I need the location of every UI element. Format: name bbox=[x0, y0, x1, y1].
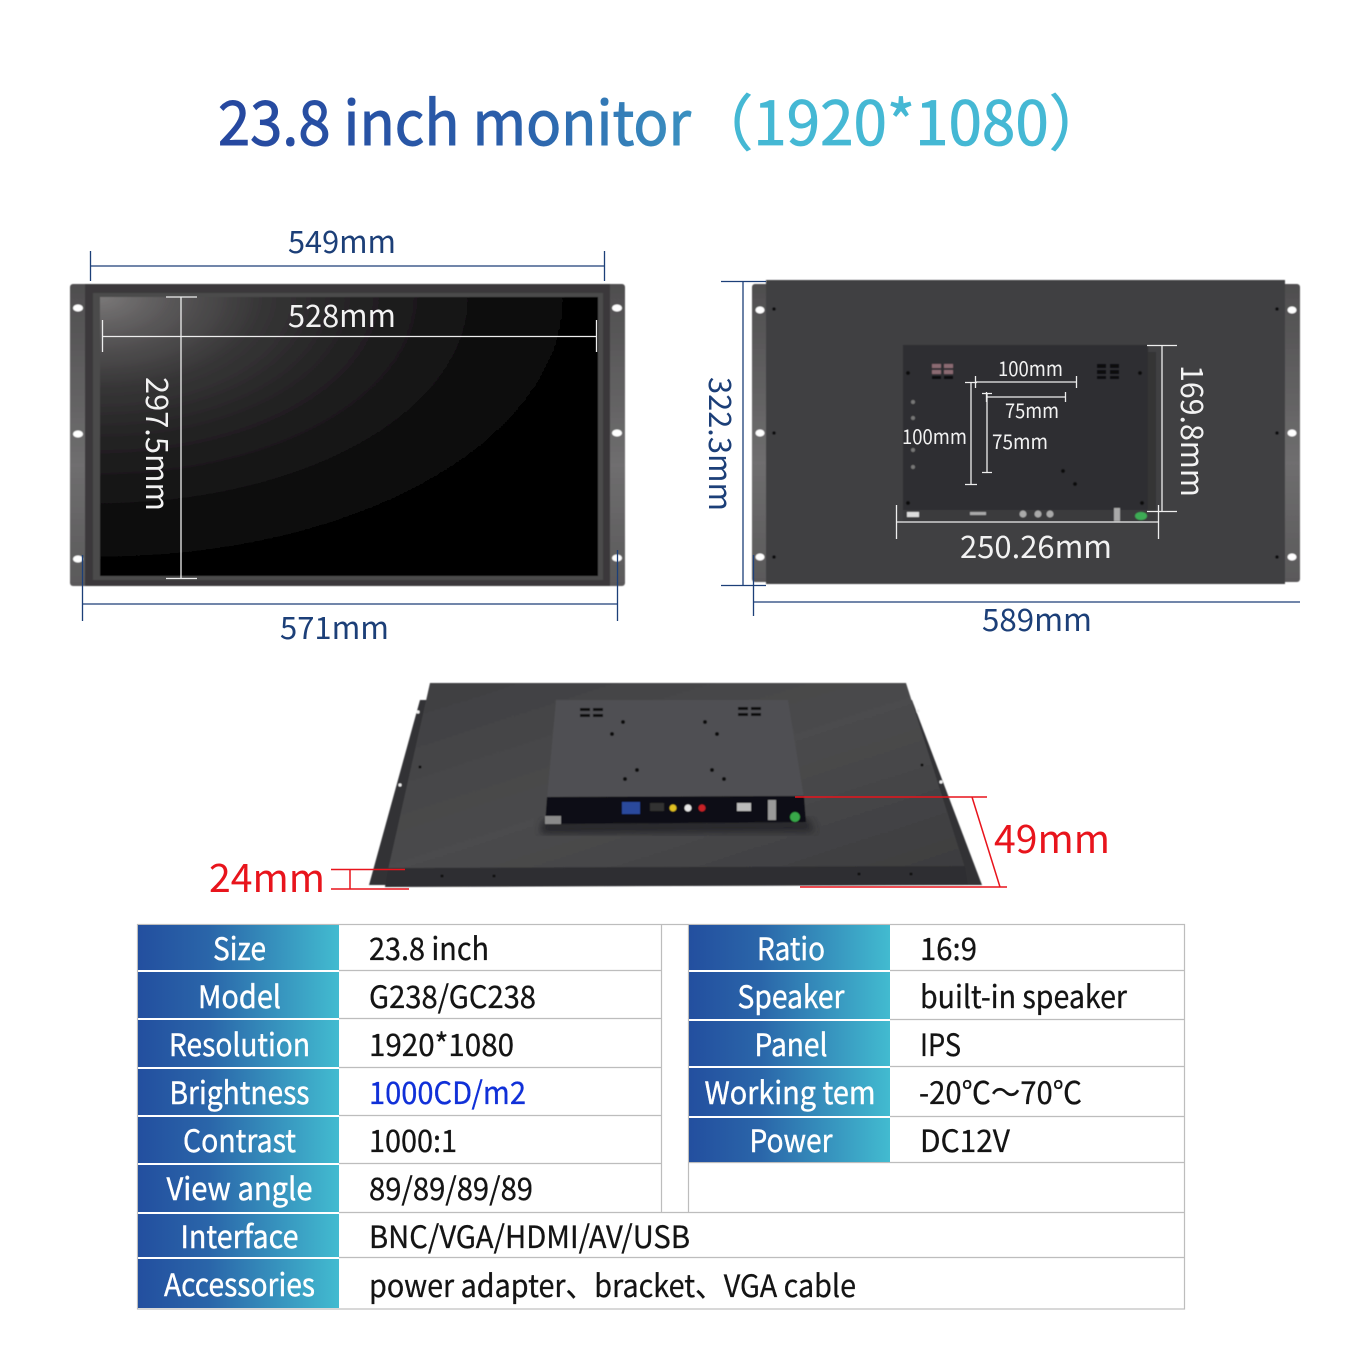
dimension: 100mm vertical: 100mm bbox=[902, 421, 967, 450]
monitor front frame bbox=[70, 284, 625, 586]
dimension: 24mm: 24mm bbox=[209, 848, 325, 904]
dimension: 250.26mm bbox=[896, 505, 1159, 567]
right label cells: Power bbox=[750, 1116, 833, 1161]
right label cells: Speaker bbox=[738, 972, 845, 1017]
dimension: 589mm: 589mm bbox=[982, 595, 1092, 640]
left label cells: View angle bbox=[166, 1164, 312, 1209]
dimension: 100mm horizontal bbox=[975, 353, 1077, 388]
panel: front view monitor bbox=[70, 217, 625, 648]
left value cells: 89/89/89/89 bbox=[369, 1164, 533, 1209]
dimension: 571mm: 571mm bbox=[280, 603, 389, 648]
dimension: 528mm bbox=[102, 291, 597, 352]
panel: perspective rear view bbox=[209, 683, 1110, 904]
monitor rear body bbox=[752, 280, 1300, 584]
left value cells: 1000:1 bbox=[369, 1116, 457, 1161]
left value cells: BNC/VGA/HDMI/AV/USB bbox=[369, 1212, 690, 1257]
spec table bbox=[138, 924, 1184, 1309]
dimension: 322.3mm: 322.3mm bbox=[700, 377, 745, 511]
right label cells: Panel bbox=[754, 1020, 828, 1065]
left value cells: G238/GC238 bbox=[369, 972, 536, 1017]
dimension: 100mm vertical bbox=[902, 382, 977, 485]
title: （1920*1080） bbox=[693, 74, 1109, 163]
dimension: 24mm bbox=[209, 848, 409, 904]
left label cells: Resolution bbox=[169, 1020, 310, 1065]
right value cells: IPS bbox=[920, 1020, 961, 1065]
right label cells: Working tem bbox=[704, 1068, 876, 1113]
dimension: 49mm bbox=[795, 797, 1110, 887]
dimension: 297.500mm: 297.5mm bbox=[137, 377, 182, 511]
left label cells: Brightness bbox=[170, 1068, 310, 1113]
dimension: 75mm vertical: 75mm bbox=[992, 426, 1048, 455]
left value cells: 23.8 inch bbox=[369, 924, 489, 969]
left value cells: 1920*1080 bbox=[369, 1020, 514, 1065]
left label cells: Accessories bbox=[164, 1260, 315, 1305]
dimension: 297.500mm bbox=[137, 297, 197, 579]
right value cells: -20℃～70℃ bbox=[919, 1068, 1082, 1113]
left label cells: Contrast bbox=[183, 1116, 296, 1161]
left label cells: Interface bbox=[180, 1212, 298, 1257]
dimension: 75mm horizontal: 75mm bbox=[1005, 395, 1059, 424]
right label cells: Ratio bbox=[757, 924, 825, 969]
dimension: 75mm horizontal bbox=[986, 392, 1066, 424]
dimension: 322.3mm bbox=[700, 281, 766, 586]
left label cells: Size bbox=[213, 924, 266, 969]
dimension: 549mm: 549mm bbox=[288, 217, 396, 262]
dimension: 571mm bbox=[82, 550, 618, 648]
left value cells: power adapter、bracket、VGA cable bbox=[369, 1261, 856, 1306]
dimension: 549mm bbox=[90, 217, 605, 281]
left label cells bbox=[138, 924, 339, 1308]
dimension: 169.8mm: 169.8mm bbox=[1172, 365, 1217, 497]
dimension: 75mm vertical bbox=[982, 393, 1048, 473]
dimension: 169.8mm bbox=[1147, 345, 1217, 512]
left value cells: 1000CD/m2 bbox=[369, 1068, 526, 1113]
right value cells: built-in speaker bbox=[920, 972, 1128, 1017]
table grid bbox=[138, 924, 1184, 1309]
dimension: 49mm: 49mm bbox=[994, 809, 1110, 865]
dimension: 528mm: 528mm bbox=[288, 291, 396, 336]
right label cells bbox=[689, 924, 890, 1162]
title bbox=[218, 74, 1109, 163]
left label cells: Model bbox=[198, 972, 281, 1017]
title: 23.8 inch monitor bbox=[218, 74, 691, 163]
right value cells: 16:9 bbox=[920, 924, 977, 969]
dimension: 589mm bbox=[753, 555, 1300, 640]
panel: rear view monitor bbox=[700, 280, 1300, 640]
dimension: 100mm horizontal: 100mm bbox=[998, 353, 1063, 382]
dimension: 250.26mm: 250.26mm bbox=[960, 522, 1112, 567]
monitor perspective body bbox=[369, 683, 982, 887]
left value cells bbox=[369, 924, 856, 1306]
right value cells bbox=[919, 924, 1128, 1161]
right value cells: DC12V bbox=[920, 1116, 1010, 1161]
